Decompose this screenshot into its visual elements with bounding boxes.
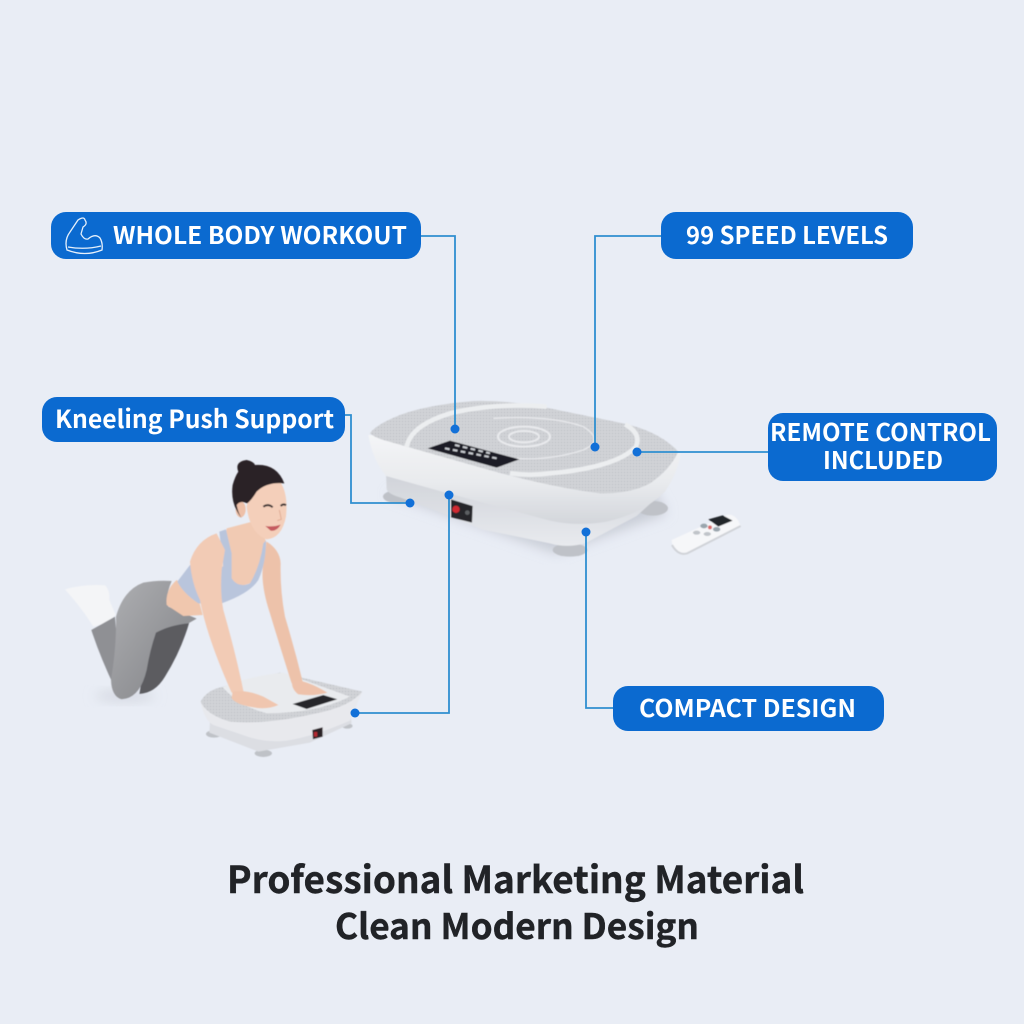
subheading: Clean Modern Design xyxy=(335,899,699,950)
small plate textured top xyxy=(201,673,362,722)
small plate base xyxy=(209,710,352,752)
floor shadow under knee xyxy=(95,691,155,701)
remote control xyxy=(672,515,741,554)
small plate feet xyxy=(206,723,353,757)
inner ring xyxy=(493,418,594,459)
label: whole body workout xyxy=(51,212,421,259)
small plate display xyxy=(293,695,337,709)
textured top surface xyxy=(370,401,678,493)
sports bra xyxy=(177,529,266,603)
ear xyxy=(236,501,246,517)
small plate white centre xyxy=(223,673,350,713)
eyes, nose and smile xyxy=(263,504,286,531)
label: remote control included: INCLUDED xyxy=(823,441,943,476)
near hand xyxy=(232,691,278,708)
label: 99 speed levels: 99 SPEED LEVELS xyxy=(686,216,888,251)
connector lines xyxy=(345,236,768,713)
label: kneeling push support: Kneeling Push Support xyxy=(55,400,334,436)
connector dots xyxy=(350,424,642,718)
face xyxy=(247,482,286,539)
label: compact design: COMPACT DESIGN xyxy=(639,689,856,724)
display panel xyxy=(428,441,519,468)
remote buttons xyxy=(693,524,720,536)
rubber feet xyxy=(383,490,668,557)
white socks xyxy=(65,585,116,627)
far arm xyxy=(262,542,303,683)
heading: Professional Marketing Material xyxy=(227,850,804,904)
hair xyxy=(232,460,284,518)
main vibration plate product xyxy=(368,401,681,557)
far thigh xyxy=(139,620,190,694)
label: compact design xyxy=(613,686,884,731)
far lower leg xyxy=(91,617,117,688)
label: remote control included: REMOTE CONTROL xyxy=(770,413,991,448)
leggings hips and thigh xyxy=(111,581,197,699)
floor shadow xyxy=(387,483,667,553)
icon: flexed arm xyxy=(66,218,102,254)
small plate under woman xyxy=(201,673,362,757)
far hand xyxy=(292,680,327,695)
upper shell xyxy=(368,435,681,524)
power switch panel xyxy=(451,499,473,523)
remote screen xyxy=(708,515,733,527)
neck and chest xyxy=(222,520,267,588)
near arm xyxy=(190,533,244,694)
midriff xyxy=(166,580,203,616)
label: 99 speed levels xyxy=(661,212,913,259)
label: whole body workout: WHOLE BODY WORKOUT xyxy=(113,216,407,251)
white ring on surface xyxy=(407,405,637,475)
small plate switch xyxy=(312,727,323,739)
label: remote control included xyxy=(768,413,997,481)
centre emblem xyxy=(498,427,550,447)
woman on kneeling push-up xyxy=(65,460,327,708)
lower base xyxy=(386,470,663,546)
small plate shell xyxy=(201,692,362,741)
